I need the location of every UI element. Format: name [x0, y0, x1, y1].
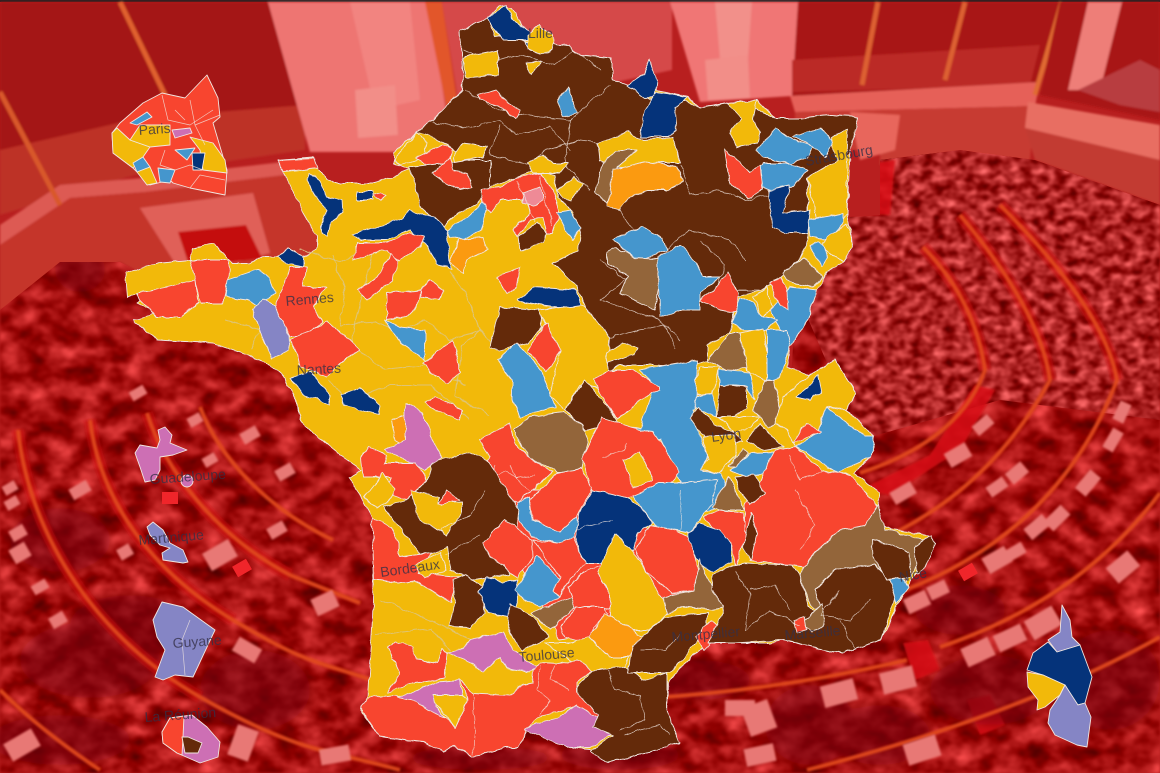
inset: Guyane — [153, 602, 222, 680]
label: Guyane: Guyane — [172, 632, 222, 651]
coloured constituencies — [125, 5, 935, 763]
region: Brittany and Pays de la Loire — [137, 248, 637, 417]
region: Rhone valley and Drome — [635, 447, 880, 593]
region: Normandy and Picardy — [277, 132, 490, 273]
region: Rhone-Alpes — [692, 360, 875, 473]
region: Auvergne and Limousin — [477, 360, 725, 640]
France silhouette — [125, 5, 935, 763]
label: La Reunion: La Réunion — [144, 704, 217, 725]
label: Lille: Lille — [528, 25, 553, 41]
region: Provence and Alps — [663, 505, 935, 653]
label: Strasbourg: Strasbourg — [804, 141, 874, 169]
label: Toulouse: Toulouse — [518, 644, 575, 665]
label: Lyon: Lyon — [710, 425, 742, 445]
region: Poitou and Aquitaine — [362, 397, 575, 692]
inset: Martinique — [138, 522, 205, 563]
label: Martinique: Martinique — [138, 526, 205, 548]
label: Marseille: Marseille — [784, 622, 841, 643]
inset: La Reunion — [144, 704, 220, 763]
label: Montpellier: Montpellier — [671, 623, 741, 645]
region: Ile-de-France — [480, 155, 583, 250]
label: Rennes: Rennes — [285, 289, 334, 309]
insets — [112, 75, 1092, 763]
labels on the mainland — [285, 25, 928, 665]
label: Guadeloupe: Guadeloupe — [149, 466, 227, 487]
label: Nantes: Nantes — [296, 360, 341, 378]
region: Centre and Burgundy — [595, 132, 738, 317]
map of France by constituency — [125, 5, 935, 763]
label: Bordeaux: Bordeaux — [379, 556, 441, 580]
inset: Paris area — [112, 75, 227, 195]
region: Nord — [463, 5, 687, 137]
department lines in the west — [225, 245, 497, 650]
inset: Guadeloupe — [135, 427, 227, 487]
inset: Corsica — [1027, 605, 1092, 747]
region: Franche-Comte — [707, 258, 823, 383]
region: north and east — [417, 17, 858, 375]
region: Languedoc — [577, 613, 723, 763]
region: Midi-Pyrenees — [360, 533, 672, 757]
region: Lyon — [690, 408, 783, 478]
label: Nice: Nice — [898, 564, 928, 585]
region: Lorraine and Alsace — [725, 100, 853, 267]
label: Paris: Paris — [138, 120, 171, 138]
